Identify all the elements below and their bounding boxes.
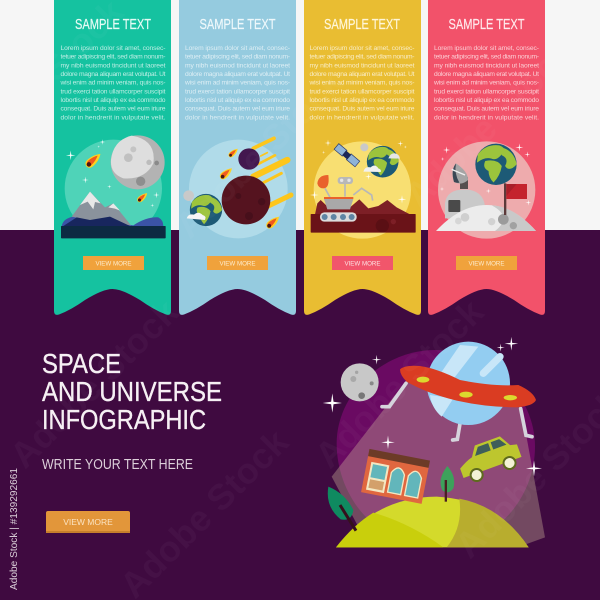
- illustration: asteroids and earth: [183, 138, 291, 238]
- page background bottom: [0, 230, 600, 600]
- text block: blue panel: [184, 45, 290, 121]
- text block: teal panel: consequat. Duis autem vel eum iriure: [60, 106, 166, 113]
- text block: yellow panel: my nibh euismod tincidunt ut laoreet: [310, 62, 415, 69]
- text block: red panel: lobortis nisl ut aliquip ex ea commodo: [434, 97, 539, 104]
- page background top: [0, 0, 600, 231]
- button: view more: [46, 511, 130, 533]
- button: red panel: VIEW MORE: [468, 260, 505, 268]
- text block: red panel: my nibh euismod tincidunt ut laoreet: [434, 62, 539, 69]
- text block: teal panel: dolor in hendrerit in vulputate velit.: [60, 114, 166, 121]
- heading: red panel: SAMPLE TEXT: [448, 17, 525, 33]
- heading: yellow panel: SAMPLE TEXT: [324, 17, 400, 33]
- watermarks: Adobe Stock: [397, 30, 582, 216]
- stars: [323, 337, 542, 476]
- text block: yellow panel: tetuer adipiscing elit, sed diam nonum-: [310, 54, 414, 61]
- text block: yellow panel: dolore magna aliquam erat volutpat. Ut: [310, 71, 415, 78]
- button: view more: VIEW MORE: [63, 517, 113, 527]
- text block: yellow panel: wisi enim ad minim veniam, quis nos-: [308, 80, 414, 87]
- panel: blue ribbon: [179, 0, 296, 315]
- button: blue panel: VIEW MORE: [219, 260, 256, 268]
- text block: red panel: dolore magna aliquam erat volutpat. Ut: [434, 71, 539, 78]
- button: teal panel: VIEW MORE: [95, 260, 132, 268]
- text block: red panel: dolor in hendrerit in vulputate velit.: [434, 114, 539, 121]
- moon: [341, 363, 379, 401]
- heading: blue panel: SAMPLE TEXT: [200, 17, 276, 33]
- text block: blue panel: consequat. Duis autem vel eum iriure: [185, 106, 290, 113]
- text block: red panel: Lorem ipsum dolor sit amet, consec-: [434, 45, 539, 52]
- text block: teal panel: lobortis nisl ut aliquip ex ea commodo: [60, 97, 166, 104]
- panel: red ribbon: [428, 0, 545, 315]
- title: AND UNIVERSE: [42, 376, 222, 407]
- button: blue panel: [207, 256, 268, 270]
- text block: blue panel: wisi enim ad minim veniam, quis nos-: [184, 80, 290, 87]
- text block: yellow panel: Lorem ipsum dolor sit amet, consec-: [310, 45, 414, 52]
- illustration: moon base with flag: [436, 141, 536, 239]
- illustration: ufo abducting car and shop: [323, 337, 545, 547]
- text block: teal panel: wisi enim ad minim veniam, quis nos-: [60, 80, 166, 87]
- purple circle backdrop: [337, 350, 535, 547]
- button: teal panel: [83, 256, 144, 270]
- text block: teal panel: Lorem ipsum dolor sit amet, consec-: [60, 45, 166, 52]
- text block: yellow panel: consequat. Duis autem vel eum iriure: [310, 106, 415, 113]
- text block: red panel: [433, 45, 539, 121]
- text block: blue panel: lobortis nisl ut aliquip ex ea commodo: [185, 97, 290, 104]
- heading: teal panel: SAMPLE TEXT: [75, 17, 151, 33]
- text block: red panel: tetuer adipiscing elit, sed diam nonum-: [434, 54, 539, 61]
- button: yellow panel: VIEW MORE: [344, 260, 381, 268]
- text block: blue panel: dolore magna aliquam erat volutpat. Ut: [185, 71, 290, 78]
- watermarks: Adobe Stock: [307, 290, 492, 476]
- text block: blue panel: trud exerci tation ullamcorper suscipit: [185, 88, 290, 95]
- text block: yellow panel: [308, 45, 415, 121]
- tree right: [441, 466, 454, 502]
- button: yellow panel: [332, 256, 393, 270]
- text block: yellow panel: dolor in hendrerit in vulputate velit.: [310, 114, 415, 121]
- panel: teal ribbon: [54, 0, 171, 315]
- text block: teal panel: [60, 45, 166, 121]
- text block: yellow panel: lobortis nisl ut aliquip ex ea commodo: [310, 97, 415, 104]
- button: red panel: [456, 256, 517, 270]
- text block: teal panel: my nibh euismod tincidunt ut laoreet: [60, 62, 166, 69]
- text block: blue panel: tetuer adipiscing elit, sed diam nonum-: [185, 54, 290, 61]
- hill: [336, 497, 529, 547]
- text block: blue panel: Lorem ipsum dolor sit amet, consec-: [185, 45, 290, 52]
- title: [42, 348, 222, 435]
- title: INFOGRAPHIC: [42, 404, 206, 435]
- text block: blue panel: my nibh euismod tincidunt ut laoreet: [185, 62, 290, 69]
- car: [454, 432, 524, 485]
- text block: teal panel: tetuer adipiscing elit, sed diam nonum-: [60, 54, 166, 61]
- text block: red panel: trud exerci tation ullamcorper suscipit: [434, 88, 539, 95]
- illustration: moon and mountains: [61, 135, 166, 238]
- text block: red panel: wisi enim ad minim veniam, quis nos-: [433, 80, 539, 87]
- illustration: mars rover: [310, 140, 416, 239]
- panel: yellow ribbon: [304, 0, 421, 315]
- text block: teal panel: dolore magna aliquam erat volutpat. Ut: [60, 71, 166, 78]
- text block: red panel: consequat. Duis autem vel eum iriure: [434, 106, 539, 113]
- shop: [361, 449, 430, 504]
- text block: blue panel: dolor in hendrerit in vulputate velit.: [185, 114, 290, 121]
- title: SPACE: [42, 348, 121, 379]
- tree left: [328, 487, 356, 531]
- watermarks: Adobe Stock: [167, 60, 352, 246]
- watermarks: Adobe Stock: [2, 290, 187, 476]
- ufo: [382, 342, 536, 440]
- text block: yellow panel: trud exerci tation ullamcorper suscipit: [310, 88, 415, 95]
- side credit text: Adobe Stock | #139292661: [8, 468, 20, 590]
- light beam: [332, 380, 545, 544]
- subtitle: WRITE YOUR TEXT HERE: [42, 457, 193, 473]
- text block: teal panel: trud exerci tation ullamcorper suscipit: [60, 88, 166, 95]
